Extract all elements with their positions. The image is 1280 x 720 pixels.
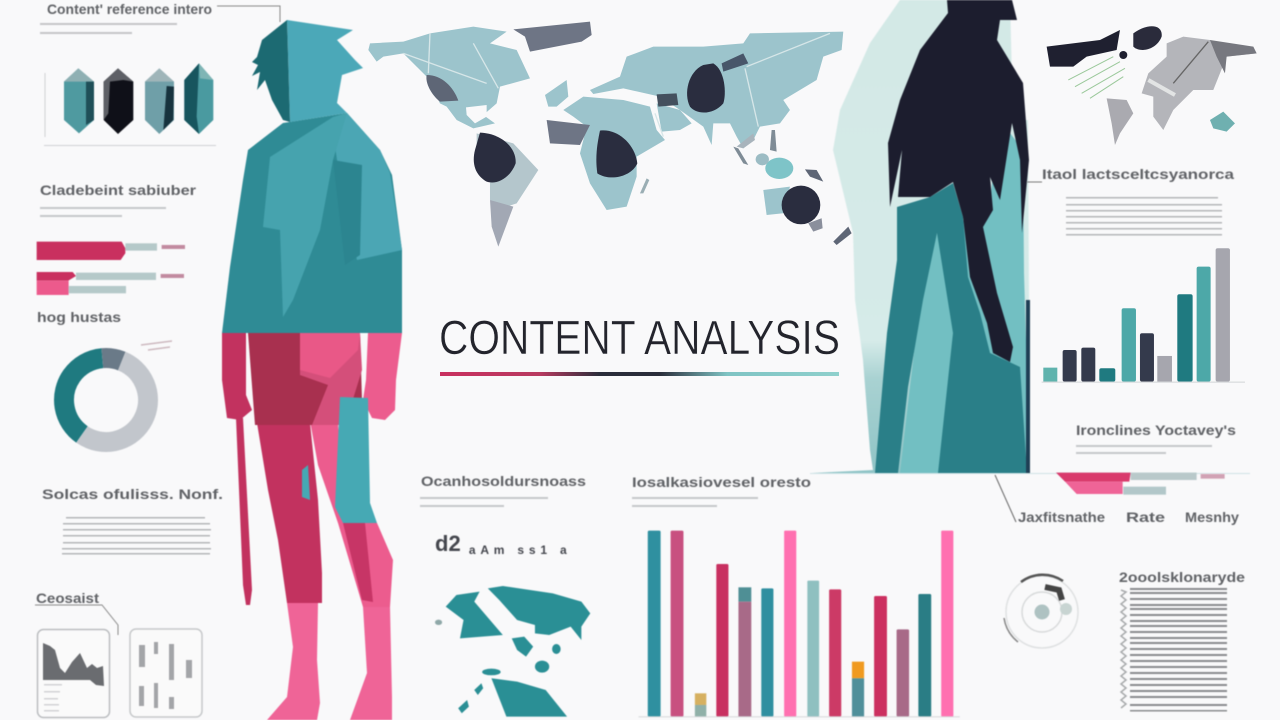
grey region (1142, 37, 1257, 130)
land boundary lines (403, 33, 830, 137)
bars text lines (40, 207, 166, 217)
silhouette legs (875, 183, 1027, 473)
map caption: d2 (435, 531, 461, 556)
panel: donut chart (37, 309, 172, 458)
figure lower legs pink (267, 603, 320, 720)
heading: tall bars: Iosalkasiovesel oresto (632, 474, 811, 490)
heading: mini map: Ocanhosoldursnoass (421, 473, 586, 489)
north america cutout (466, 105, 487, 123)
donut (48, 342, 164, 458)
text lines (420, 497, 548, 507)
heading: lower right: Ironclines Yoctavey's (1076, 422, 1236, 438)
heading: donut: hog hustas (37, 309, 121, 325)
paragraph lines (62, 517, 211, 554)
gem frame (44, 73, 216, 146)
panel: lower right bars (995, 422, 1239, 525)
land masses (368, 27, 843, 215)
figure: dark-haired silhouette (810, 0, 1250, 474)
leader line to figure (217, 6, 280, 22)
panel: lower right bars: Rate (1126, 509, 1165, 525)
islands (640, 130, 852, 245)
figure: teal and pink standing person (222, 20, 402, 720)
figure pink lower band (300, 333, 360, 378)
funnel bars (1056, 473, 1225, 495)
heading: right text: Itaol lactsceltcsyanorca (1042, 166, 1234, 182)
gem text lines (40, 23, 177, 34)
figure thigh left (257, 423, 322, 603)
panel: lower right bars: Mesnhy (1185, 509, 1239, 525)
south america (1107, 98, 1133, 145)
greenland (513, 22, 592, 52)
panel: bottom-left mini cards (35, 590, 202, 718)
figure arm right (363, 333, 402, 420)
heading: cards: Ceosaist (36, 590, 99, 606)
panel: top-left gems (40, 1, 280, 146)
paragraph lines (1066, 197, 1222, 236)
map: main world map (368, 22, 852, 247)
map caption: aAm ss1 a (461, 543, 567, 557)
baseline (810, 472, 1250, 474)
figure pole (236, 418, 252, 605)
map shapes (435, 586, 590, 717)
figure arm left (222, 333, 252, 420)
region highlights (426, 53, 820, 224)
heading: text block: Solcas ofulisss. Nonf. (42, 486, 223, 502)
figure hips (248, 333, 362, 425)
figure torso teal (222, 113, 402, 333)
card: area chart (38, 630, 110, 718)
dark region (1047, 30, 1120, 67)
heading: bars: Cladebeint sabiuber (40, 182, 197, 198)
silhouette pale backdrop (812, 0, 1030, 473)
panel: mini teal map (420, 473, 590, 717)
heading: content reference: Content' reference intero (47, 1, 212, 17)
figure head (287, 20, 363, 122)
text lines (1076, 445, 1212, 454)
card: small marks (130, 629, 202, 717)
map: small top-right world map (1047, 26, 1257, 145)
silhouette mid teal (900, 120, 1030, 473)
silhouette dark hair and body (888, 0, 1029, 362)
small note (141, 341, 172, 350)
australia (1210, 112, 1235, 132)
gem icons (64, 63, 213, 134)
list lines (1130, 588, 1227, 712)
leader line (35, 605, 118, 635)
panel: left horizontal bars (37, 182, 197, 295)
bar chart: right (1042, 248, 1245, 383)
figure teal bag (335, 397, 377, 523)
figure upper right leg (308, 410, 393, 607)
panel: list (1119, 569, 1245, 712)
leader line (1027, 181, 1042, 183)
bar chart (37, 242, 185, 295)
green hatching (1068, 57, 1125, 98)
title underline (440, 372, 839, 376)
bars (638, 531, 960, 717)
labels: Jaxfitsnathe (1018, 509, 1105, 525)
icon: circular gauge (1004, 575, 1078, 648)
text lines (632, 497, 758, 507)
silhouette shadow edge (1026, 300, 1030, 473)
leader line (995, 475, 1016, 522)
list ticks (1121, 590, 1126, 708)
heading: list: 2ooolsklonaryde (1119, 569, 1245, 585)
south america (477, 133, 538, 207)
panel: tall bar chart (632, 474, 960, 717)
title: CONTENT ANALYSIS (439, 312, 840, 365)
